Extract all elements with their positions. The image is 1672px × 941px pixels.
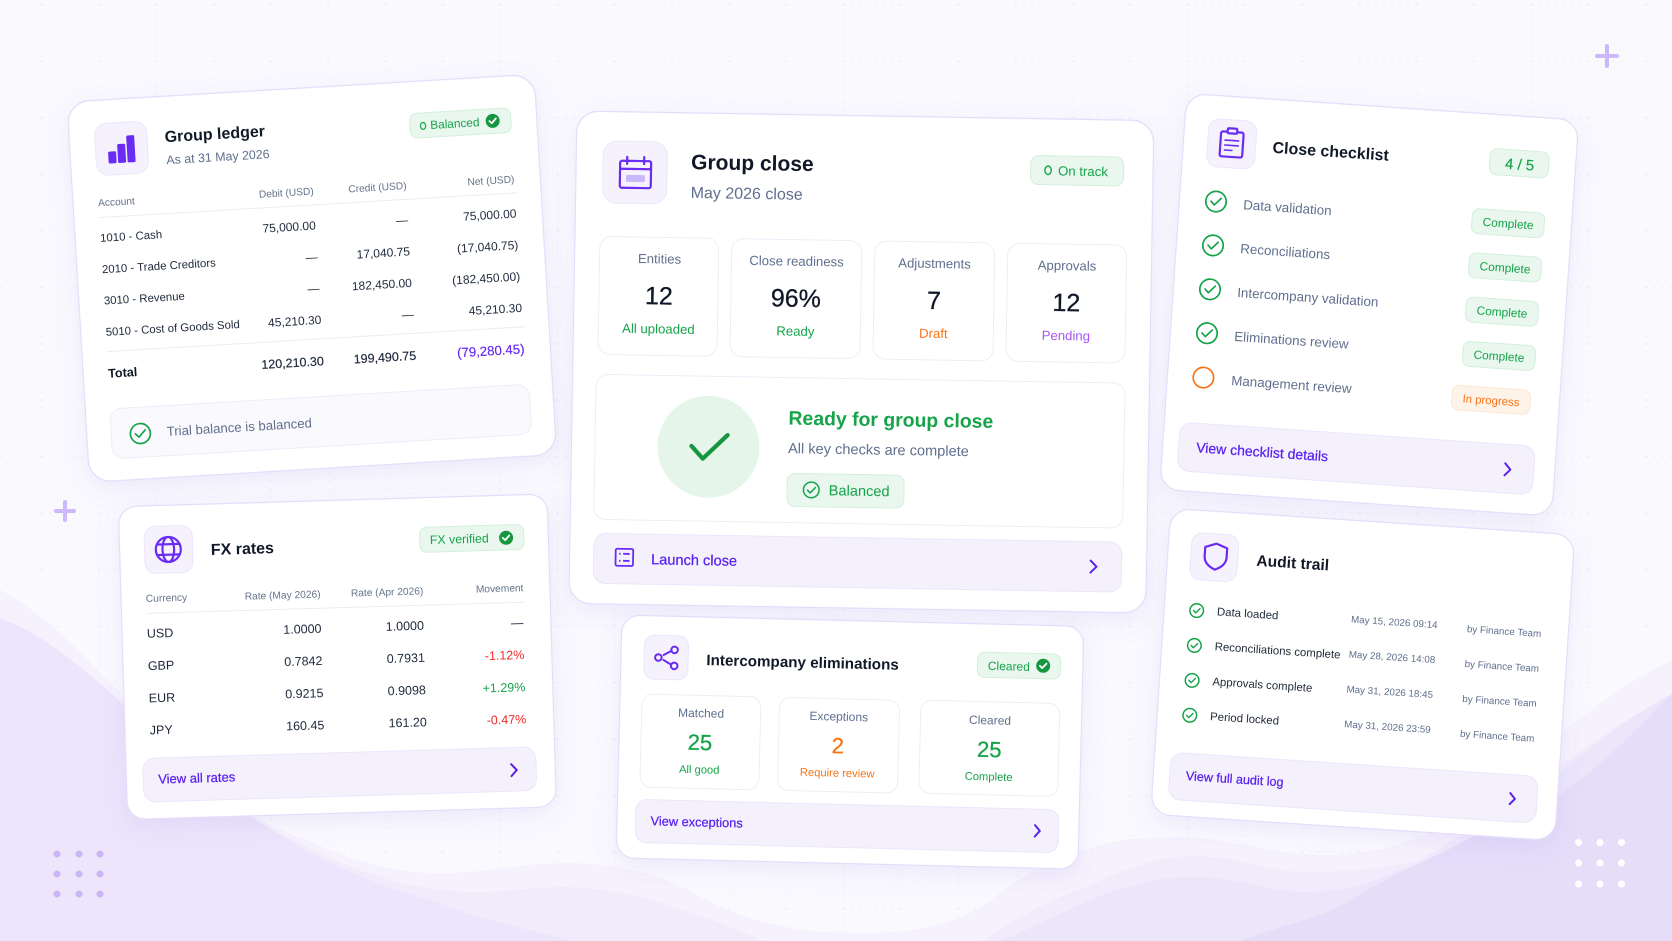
stat: Cleared: [919, 700, 1060, 796]
callout: trial balance: [110, 384, 532, 459]
checklist item: Intercompany validation: Intercompany validation: [1237, 285, 1379, 310]
table: ledger accounts: 2010 - Trade Creditors: [102, 257, 216, 276]
table: ledger accounts: Total: [108, 365, 138, 381]
table: ledger accounts: Net (USD): [467, 175, 515, 188]
audit entry: Period locked: May 31, 2026 23:59: [1344, 719, 1431, 736]
table: ledger accounts: (182,450.00): [452, 269, 521, 287]
checklist item: Reconciliations: Complete: [1479, 259, 1531, 277]
table: FX rates: Currency: [146, 593, 188, 605]
checklist item: Eliminations review: [1196, 322, 1536, 371]
checklist item: Eliminations review: Eliminations review: [1234, 329, 1349, 352]
heading: Group close: Group close: [691, 151, 814, 176]
audit entry: Period locked: Period locked: [1210, 711, 1279, 728]
table: ledger accounts: 199,490.75: [353, 349, 417, 366]
table: FX rates: 1.0000: [283, 622, 322, 637]
panel: Group ledger: [67, 74, 557, 482]
heading: FX rates: FX rates: [211, 540, 274, 559]
table: ledger accounts: 17,040.75: [356, 244, 411, 262]
table: FX rates: -1.12%: [485, 648, 525, 663]
audit entry: Approvals complete: [1185, 673, 1537, 710]
icon: bar chart: [94, 121, 149, 176]
table: ledger accounts: 5010 - Cost of Goods Sold: [105, 319, 240, 339]
checklist item: Management review: In progress: [1462, 393, 1520, 409]
panel: Group close: [569, 111, 1154, 613]
table: ledger accounts: Debit (USD): [259, 187, 314, 201]
stat: Matched: [640, 694, 761, 790]
checklist item: Reconciliations: [1202, 234, 1542, 282]
badge: FX verified: FX verified: [430, 531, 489, 547]
table: FX rates: 160.45: [286, 718, 325, 733]
table: FX rates: EUR: [149, 691, 175, 705]
stat: Matched: Matched: [678, 706, 724, 721]
badge: Balanced: Balanced: [430, 115, 480, 132]
table: ledger accounts: 45,210.30: [468, 301, 523, 318]
checklist item: Management review: Management review: [1231, 373, 1352, 396]
audit entry: Data loaded: by Finance Team: [1467, 624, 1542, 640]
stat: Cleared: Complete: [965, 771, 1013, 784]
stat: Adjustments: 7: [927, 287, 941, 315]
callout: trial balance: Trial balance is balanced: [166, 415, 312, 439]
badge: 4 / 5: 4 / 5: [1504, 156, 1535, 175]
table: FX rates: —: [511, 616, 524, 630]
table: ledger accounts: 3010 - Revenue: [104, 291, 185, 308]
audit entry: Approvals complete: May 31, 2026 18:45: [1346, 684, 1434, 701]
badge: Balanced: [409, 108, 512, 138]
stat: Matched: 25: [687, 730, 712, 755]
heading: Group ledger: Group ledger: [164, 123, 265, 146]
audit entry: Reconciliations complete: Reconciliations complete: [1214, 641, 1341, 662]
badge: 4 / 5: [1489, 148, 1550, 178]
checklist item: Intercompany validation: Complete: [1476, 303, 1528, 321]
stat: Entities: Entities: [638, 251, 682, 267]
table: ledger accounts: 182,450.00: [351, 276, 413, 293]
checklist item: Intercompany validation: [1199, 278, 1539, 327]
stat: Adjustments: [873, 241, 995, 361]
table: FX rates: GBP: [148, 658, 174, 673]
table: ledger accounts: Credit (USD): [348, 181, 407, 195]
table: ledger accounts: (79,280.45): [457, 341, 525, 360]
table: FX rates: JPY: [150, 723, 174, 737]
audit entry: Reconciliations complete: by Finance Team: [1464, 659, 1539, 675]
icon: list: [615, 549, 633, 566]
table: ledger accounts: [98, 173, 527, 381]
table: FX rates: Rate (Apr 2026): [351, 586, 424, 600]
table: ledger accounts: —: [305, 250, 318, 265]
button: View all rates: View all rates: [158, 769, 236, 787]
stat: Close readiness: 96%: [771, 284, 821, 313]
table: FX rates: Rate (May 2026): [245, 589, 321, 603]
icon: globe: [144, 525, 193, 574]
checklist item: Data validation: Data validation: [1243, 197, 1332, 218]
panel: FX rates: [118, 494, 556, 820]
stat: Entities: 12: [645, 282, 673, 311]
checklist item: Eliminations review: Complete: [1473, 348, 1525, 365]
button: View exceptions: View exceptions: [650, 813, 743, 831]
subtitle: May 2026 close: [691, 185, 803, 204]
stat: Approvals: Approvals: [1038, 258, 1097, 274]
panel: Close checklist: [1160, 93, 1579, 516]
table: FX rates: Movement: [476, 583, 524, 596]
table: ledger accounts: —: [307, 281, 320, 296]
button: View checklist details: [1177, 422, 1535, 495]
table: ledger accounts: (17,040.75): [457, 238, 519, 256]
badge: FX verified: [419, 524, 524, 552]
heading: Ready for group close: Ready for group close: [788, 408, 994, 433]
stat: Cleared: 25: [977, 737, 1002, 762]
table: FX rates: 0.9215: [285, 686, 324, 701]
table: FX rates: 161.20: [388, 715, 427, 730]
icon: clipboard: [1206, 118, 1257, 169]
audit entry: Reconciliations complete: May 28, 2026 14:08: [1348, 649, 1436, 666]
decoration: dots bottom left: [54, 850, 104, 898]
panel: Intercompany eliminations: [616, 615, 1084, 869]
icon: large check: [657, 395, 760, 499]
decoration: plus left: [56, 502, 74, 520]
stat: Approvals: [1006, 243, 1127, 363]
icon: share nodes: [644, 635, 689, 680]
audit entry: Data loaded: Data loaded: [1217, 606, 1279, 622]
audit entry: Data loaded: May 15, 2026 09:14: [1351, 615, 1438, 631]
table: ledger accounts: 75,000.00: [463, 207, 517, 224]
stat: Exceptions: 2: [831, 733, 844, 758]
subtitle: As at 31 May 2026: [166, 147, 270, 167]
stat: Approvals: 12: [1052, 289, 1081, 317]
stat: Adjustments: Draft: [919, 326, 948, 341]
checklist item: Data validation: [1205, 190, 1545, 238]
button: View checklist details: View checklist details: [1196, 439, 1329, 464]
table: ledger accounts: 1010 - Cash: [100, 229, 162, 245]
stat: Close readiness: Ready: [776, 323, 815, 339]
stat: Matched: All good: [679, 764, 720, 777]
stat: Close readiness: [730, 239, 862, 359]
badge: Balanced: [787, 473, 904, 508]
stat: Exceptions: Exceptions: [809, 709, 868, 724]
table: FX rates: +1.29%: [482, 680, 526, 695]
table: FX rates: 0.7931: [386, 651, 425, 666]
table: FX rates: 0.7842: [284, 654, 323, 669]
icon: shield: [1189, 532, 1239, 582]
table: ledger accounts: 45,210.30: [268, 313, 322, 330]
table: ledger accounts: —: [401, 307, 414, 322]
audit entry: Data loaded: [1189, 603, 1542, 640]
button: Launch close: [593, 533, 1122, 592]
badge: On track: [1030, 155, 1124, 186]
heading: Audit trail: Audit trail: [1256, 553, 1330, 574]
heading: Close checklist: Close checklist: [1272, 140, 1390, 165]
checklist item: Reconciliations: Reconciliations: [1240, 241, 1331, 262]
panel: Audit trail: [1151, 508, 1575, 841]
stat: Cleared: Cleared: [969, 713, 1011, 728]
table: ledger accounts: 120,210.30: [261, 354, 324, 372]
table: FX rates: USD: [147, 626, 173, 641]
panel: Ready for group close: [594, 374, 1125, 528]
checklist item: Data validation: Complete: [1482, 215, 1534, 232]
table: ledger accounts: —: [396, 213, 409, 228]
stat: Exceptions: [777, 697, 900, 793]
audit entry: Reconciliations complete: [1187, 638, 1539, 675]
stat: Entities: All uploaded: [622, 321, 695, 337]
icon: calendar: [602, 141, 668, 204]
stat: Entities: [598, 236, 719, 356]
button: View full audit log: [1168, 752, 1538, 823]
button: View all rates: [143, 747, 537, 802]
table: ledger accounts: Account: [98, 196, 135, 209]
decoration: dots bottom right: [1575, 839, 1625, 888]
table: FX rates: -0.47%: [486, 712, 526, 727]
audit entry: Approvals complete: by Finance Team: [1462, 694, 1537, 710]
button: View exceptions: [635, 799, 1059, 853]
audit entry: Period locked: by Finance Team: [1460, 729, 1535, 745]
table: FX rates: 0.9098: [387, 683, 426, 698]
badge: On track: On track: [1058, 163, 1108, 179]
audit entry: Approvals complete: Approvals complete: [1212, 676, 1313, 695]
stat: Approvals: Pending: [1042, 328, 1090, 344]
badge: Cleared: Cleared: [988, 659, 1030, 674]
table: FX rates: [146, 583, 528, 737]
badge: Balanced: Balanced: [829, 483, 890, 500]
stat: Adjustments: Adjustments: [898, 255, 971, 272]
table: ledger accounts: 75,000.00: [262, 218, 316, 236]
stat: Close readiness: Close readiness: [749, 253, 844, 269]
badge: Cleared: [977, 652, 1061, 679]
checklist item: Management review: [1192, 367, 1531, 415]
heading: Intercompany eliminations: Intercompany eliminations: [706, 652, 899, 674]
button: View full audit log: View full audit log: [1185, 769, 1284, 789]
button: Launch close: Launch close: [651, 552, 737, 570]
text: all key checks: All key checks are complete: [788, 441, 969, 460]
stat: Exceptions: Require review: [800, 767, 876, 781]
decoration: plus top right: [1597, 46, 1617, 66]
table: FX rates: 1.0000: [386, 619, 424, 634]
audit entry: Period locked: [1183, 708, 1535, 745]
